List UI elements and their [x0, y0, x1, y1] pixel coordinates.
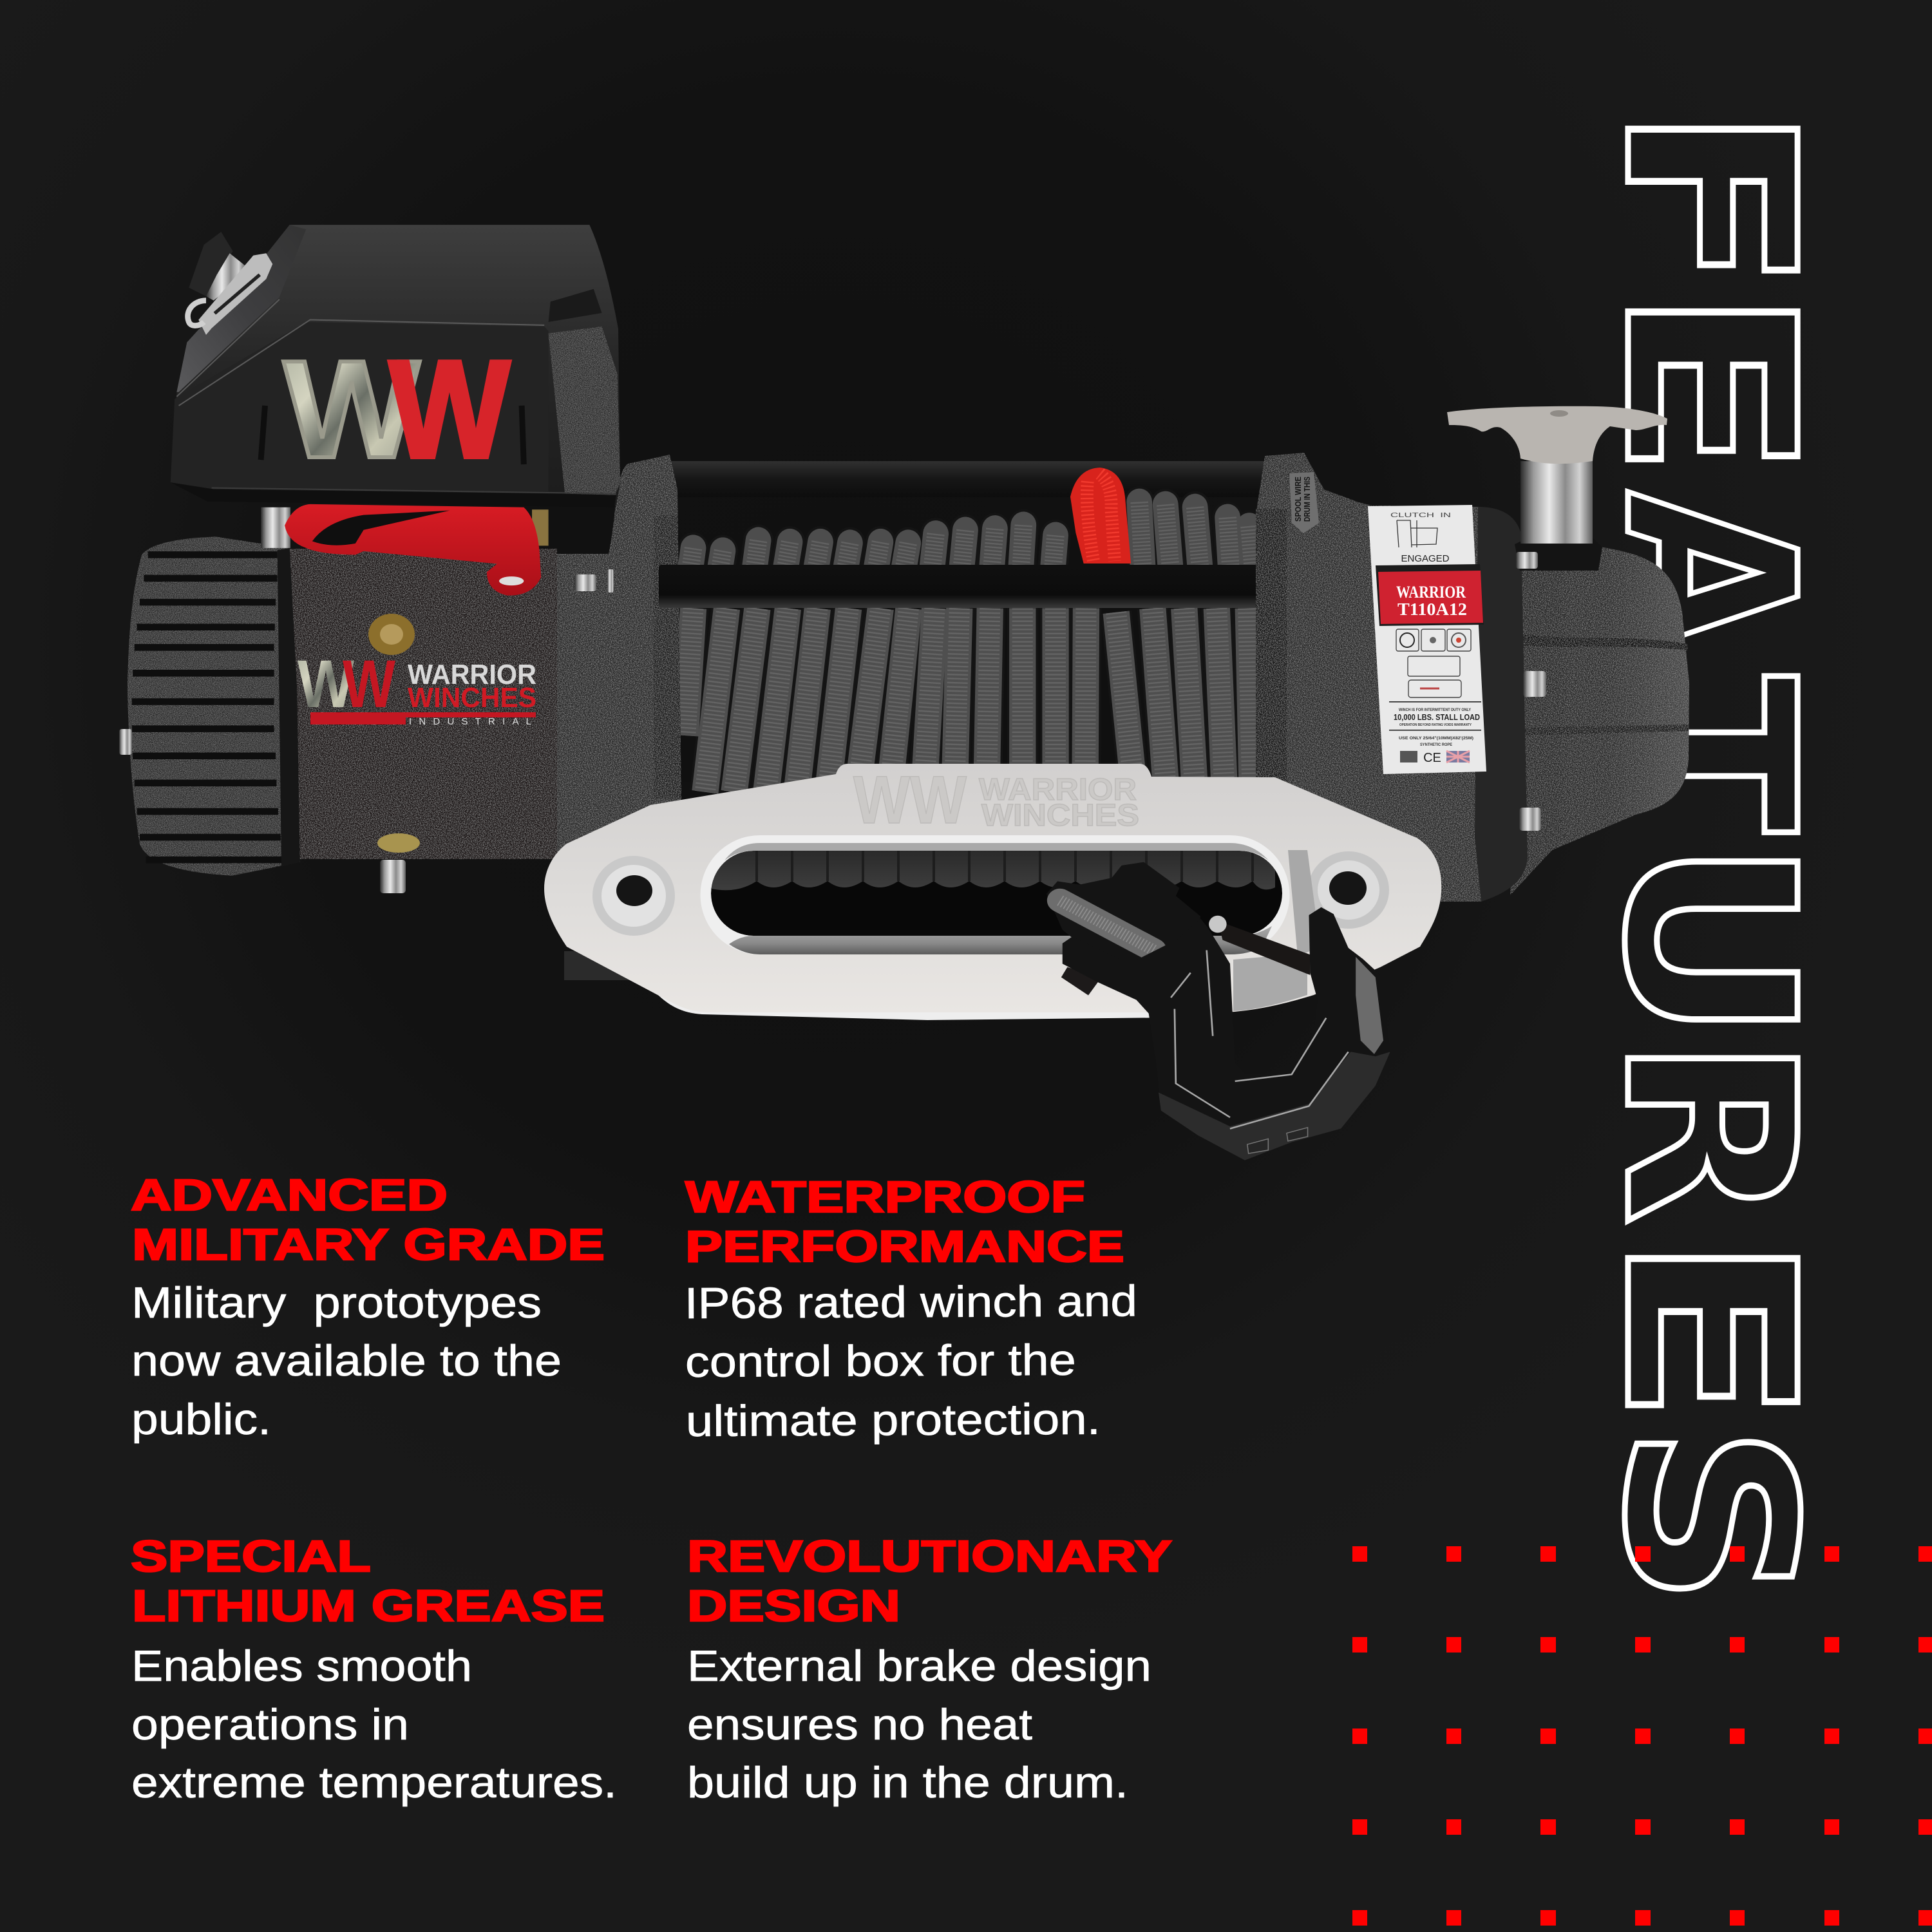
feature: revolutionary design [687, 1531, 1172, 1807]
clutch knob [1447, 406, 1667, 571]
gold screw top [368, 614, 415, 655]
body text [131, 1278, 562, 1444]
control box logo [283, 331, 510, 487]
body text: Military prototypes [131, 1278, 542, 1327]
label divider band [1376, 564, 1484, 626]
right corner [549, 327, 620, 495]
motor housing [119, 536, 557, 893]
heading: REVOLUTIONARY [687, 1531, 1172, 1581]
fairlead plate [544, 764, 1441, 1012]
slot rim [701, 835, 1289, 954]
winch badge [298, 647, 536, 727]
spool sticker: SPOOL WIRE [1293, 477, 1303, 522]
product label: 10,000 LBS. STALL LOAD [1394, 713, 1480, 722]
body text: extreme temperatures. [131, 1758, 617, 1807]
body text: External brake design [687, 1642, 1151, 1690]
body text: ensures no heat [687, 1700, 1032, 1749]
control box connector [188, 232, 272, 335]
right drum housing [1256, 453, 1481, 902]
body text: now available to the [131, 1336, 562, 1385]
vertical outlined title: E [1573, 286, 1844, 480]
control box [171, 225, 620, 507]
red model panel [1378, 571, 1483, 624]
motor cylinder [283, 549, 557, 859]
drum rope [676, 502, 1269, 792]
engraved logo: WARRIOR [979, 773, 1137, 807]
pin end [1061, 967, 1098, 996]
vertical outlined title: R [1573, 1036, 1844, 1226]
heading: WATERPROOF [685, 1172, 1085, 1222]
silver bolts [542, 552, 1546, 831]
feature: advanced military grade [131, 1170, 605, 1444]
knob collar [1515, 536, 1602, 571]
vertical outlined title [1573, 104, 1844, 1607]
vertical outlined title: T [1573, 675, 1843, 835]
product label: CE [1423, 751, 1441, 765]
heading [131, 1531, 605, 1631]
red dot grid [1352, 1546, 1932, 1926]
hook body [1063, 907, 1390, 1160]
winch badge: INDUSTRIAL [409, 716, 531, 727]
heading: DESIGN [687, 1581, 900, 1631]
rope in slot [712, 851, 1275, 890]
shackle [1046, 862, 1200, 975]
heading: MILITARY GRADE [132, 1220, 605, 1269]
box outline [171, 225, 620, 505]
engraved logo: WW [853, 762, 967, 838]
latch arm [1218, 921, 1310, 975]
right mounting hole [1308, 851, 1389, 929]
body text [685, 1276, 1137, 1446]
product label: SYNTHETIC ROPE [1420, 743, 1452, 747]
gold screw bottom [377, 833, 420, 853]
bottom lip [171, 482, 616, 507]
hook and shackle [1046, 862, 1390, 1160]
body text: public. [131, 1395, 271, 1444]
engraved logo: WINCHES [981, 799, 1139, 833]
product label: CLUTCH IN [1390, 512, 1451, 519]
flange ring [1475, 507, 1528, 902]
winch illustration [119, 225, 1689, 1160]
product label: OPERATION BEYOND RATING VOIDS WARRANTY [1399, 723, 1472, 727]
knob stem [1520, 461, 1593, 544]
vertical outlined title: U [1573, 838, 1844, 1043]
winch badge: WARRIOR [408, 659, 536, 690]
heading: ADVANCED [131, 1170, 448, 1220]
left mounting hole [592, 856, 675, 936]
body text [131, 1642, 617, 1807]
latch pin [1209, 916, 1227, 933]
body text: Enables smooth [131, 1642, 472, 1690]
control box logo: W [283, 331, 420, 487]
winch badge: W [298, 647, 354, 722]
heading [131, 1170, 605, 1269]
winch badge: W [343, 647, 395, 722]
upper tie bar [667, 461, 1266, 497]
heading: LITHIUM GREASE [132, 1581, 605, 1631]
hook glints [1171, 950, 1349, 1129]
product label: WINCH IS FOR INTERMITTENT DUTY ONLY [1399, 708, 1472, 712]
engraved logo [853, 762, 1139, 838]
body text [687, 1642, 1151, 1807]
slot backdrop [705, 844, 1285, 940]
upper rim shade [724, 843, 1269, 860]
heading: PERFORMANCE [685, 1222, 1124, 1271]
hook lugs [1247, 1128, 1308, 1153]
vertical outlined title: A [1573, 491, 1843, 656]
heading [685, 1172, 1124, 1271]
body text: ultimate protection. [686, 1395, 1101, 1446]
vertical outlined title: F [1573, 104, 1844, 293]
product label: T110A12 [1397, 600, 1467, 619]
heading: SPECIAL [131, 1531, 371, 1581]
label background [1368, 505, 1486, 774]
feature: special lithium grease [131, 1531, 617, 1807]
product label [1368, 505, 1486, 774]
red rope loop [1070, 468, 1131, 564]
red cable boot [261, 504, 549, 596]
product label: WARRIOR [1396, 583, 1466, 601]
spool sticker: DRUM IN THIS [1302, 477, 1312, 522]
under lip [634, 953, 1224, 1020]
left nut [119, 729, 132, 755]
polished highlight behind hook [1233, 953, 1307, 1011]
hook highlight patch [1356, 957, 1383, 1054]
fairlead [544, 762, 1441, 1020]
body text: build up in the drum. [687, 1758, 1128, 1807]
left slope [176, 225, 306, 392]
vertical outlined title: S [1573, 1424, 1843, 1607]
left drum housing [553, 455, 681, 860]
rope eye [1060, 900, 1153, 950]
ribbed end cap [128, 536, 300, 876]
product label: ENGAGED [1401, 553, 1450, 564]
winch badge: WINCHES [408, 682, 536, 714]
gear bell housing [1510, 536, 1689, 895]
body text: control box for the [685, 1336, 1076, 1387]
vertical outlined title: E [1573, 1233, 1844, 1425]
mount plate [564, 951, 630, 980]
lower rim shade [729, 926, 1272, 954]
feature: waterproof performance [685, 1172, 1137, 1446]
bottom bolt [380, 860, 406, 893]
body text: IP68 rated winch and [685, 1276, 1137, 1328]
heading [687, 1531, 1172, 1631]
front face [171, 322, 549, 491]
body text: operations in [131, 1700, 409, 1749]
control box logo: W [389, 331, 510, 487]
T handle [1447, 406, 1667, 464]
mid tie bar [659, 565, 1287, 608]
hook lower rim [1159, 1052, 1390, 1160]
product label: USE ONLY 25/64"(10MM)X82'(25M) [1399, 736, 1473, 741]
spool sticker [1289, 472, 1319, 533]
